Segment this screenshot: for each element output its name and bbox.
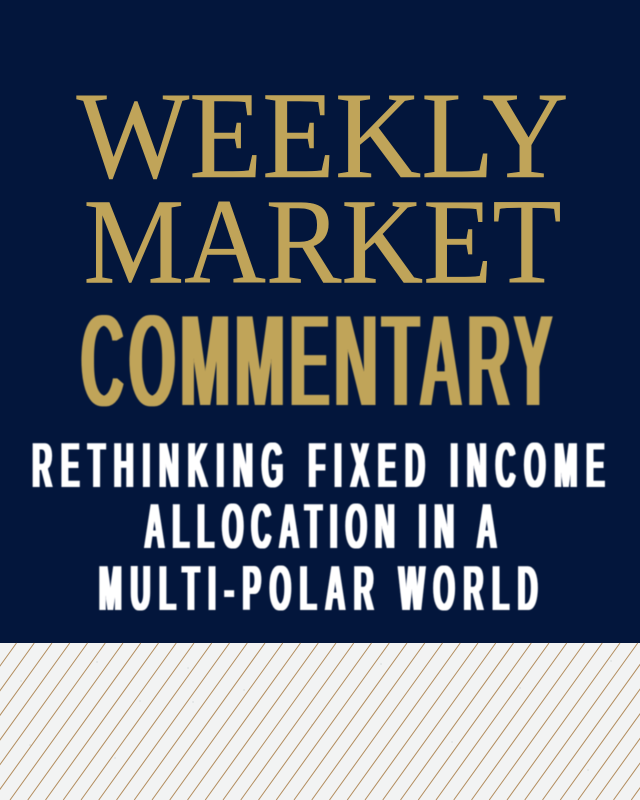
heading: MARKET: MARKET (84, 174, 562, 309)
subtitle (32, 429, 604, 625)
subtitle: ALLOCATION IN A (145, 490, 497, 563)
subtitle: MULTI-POLAR WORLD (99, 552, 537, 625)
heading: WEEKLY: WEEKLY (76, 67, 568, 204)
subtitle: RETHINKING FIXED INCOME (32, 429, 604, 502)
heading: COMMENTARY: COMMENTARY (81, 286, 553, 437)
panel: striped paper band (0, 643, 640, 800)
